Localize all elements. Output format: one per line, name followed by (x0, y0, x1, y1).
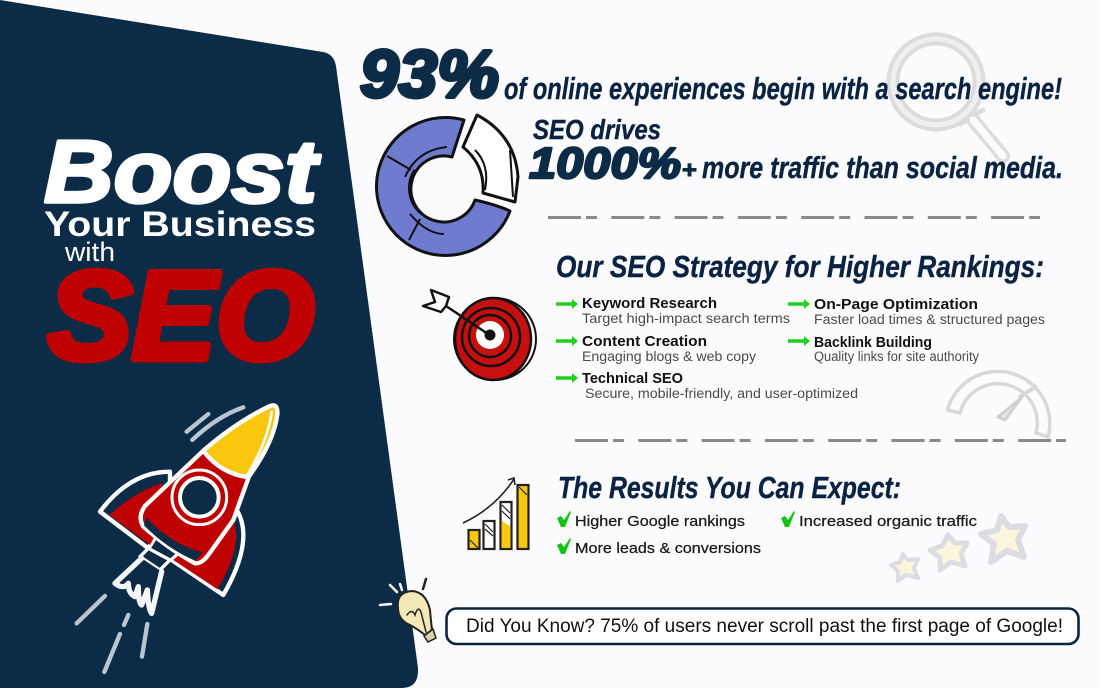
rocket body band (144, 517, 203, 561)
panel: navy left panel (0, 0, 418, 688)
item: Content Creation: Content Creation (582, 333, 707, 350)
item: On-Page Optimization (788, 296, 1045, 327)
target rings (454, 298, 536, 380)
target arrow (423, 290, 488, 334)
icon: three stars (891, 516, 1025, 581)
item: Content Creation: Engaging blogs & web copy (582, 349, 756, 364)
item: Backlink Building: Quality links for site authority (814, 349, 979, 364)
icon: speedometer gauge (948, 371, 1050, 437)
plus sign: + (682, 157, 697, 184)
bulb filament (407, 609, 426, 632)
bar 3 (500, 502, 512, 549)
bar 4 (518, 485, 528, 549)
stat: SEO traffic (529, 114, 1063, 188)
item: On-Page Optimization: Faster load times & structured pages (814, 312, 1045, 327)
list: results (557, 511, 978, 557)
result: Higher Google rankings: Higher Google rankings (575, 513, 745, 530)
item: Technical SEO: Secure, mobile-friendly, and user-optimized (585, 386, 858, 401)
item: Keyword Research: Target high-impact search terms (582, 311, 790, 326)
icon: rocket (77, 405, 277, 672)
item: Technical SEO: Technical SEO (582, 370, 683, 387)
title word: with: with (64, 237, 115, 267)
title word: SEO: SEO (48, 247, 314, 386)
rocket body (141, 451, 248, 563)
bar 3 fill (502, 520, 510, 548)
result: More leads and conversions: More leads & conversions (575, 540, 761, 557)
item: Technical SEO (556, 370, 858, 401)
bulb rays (380, 579, 426, 605)
big number 1000%: 1000% (529, 139, 681, 188)
rocket flame (115, 558, 162, 613)
bar hatching (470, 487, 527, 548)
callout: did you know: Did You Know? 75% of users never scroll past the first page of Google! (466, 616, 1063, 637)
rocket left fin (100, 472, 170, 548)
title line: Your Business: Your Business (44, 205, 316, 244)
icon: growth bar chart (463, 478, 528, 549)
text: SEO drives: SEO drives (533, 114, 661, 145)
bulb glass (398, 591, 432, 635)
speed lines (77, 407, 243, 672)
donut detail lines (387, 147, 513, 240)
rocket nose highlight (247, 412, 272, 475)
icon: target with arrow (423, 290, 536, 380)
item: Keyword Research (556, 295, 790, 326)
item: Backlink Building: Backlink Building (814, 334, 932, 351)
bulb base (424, 629, 436, 642)
rocket porthole (172, 470, 227, 525)
item: Keyword Research: Keyword Research (582, 295, 717, 312)
bar 1 (468, 530, 480, 549)
icon: donut chart (377, 115, 518, 255)
result: Increased organic traffic: Increased organic traffic (799, 513, 978, 530)
title word: Boost: Boost (44, 122, 321, 221)
bar 2 (484, 521, 494, 549)
growth arrow (463, 478, 515, 523)
big number 93%: 93% (360, 37, 499, 112)
icon: magnifying glass (893, 39, 1003, 156)
rocket right fin fill (173, 518, 236, 589)
heading: results: The Results You Can Expect: (558, 470, 901, 505)
donut purple arc (377, 117, 510, 255)
list: SEO strategy items (556, 295, 1045, 401)
rocket left fin fill (109, 483, 167, 545)
rocket right fin (172, 510, 243, 595)
donut white slice (463, 115, 518, 202)
callout: did you know (446, 608, 1078, 644)
icon: light bulb (380, 579, 436, 642)
item: On-Page Optimization: On-Page Optimization (814, 296, 978, 313)
rocket nozzle (140, 548, 170, 570)
title (44, 122, 321, 386)
rocket nose cone (203, 405, 277, 477)
item: Backlink Building (788, 334, 979, 364)
item: Content Creation (556, 333, 756, 364)
